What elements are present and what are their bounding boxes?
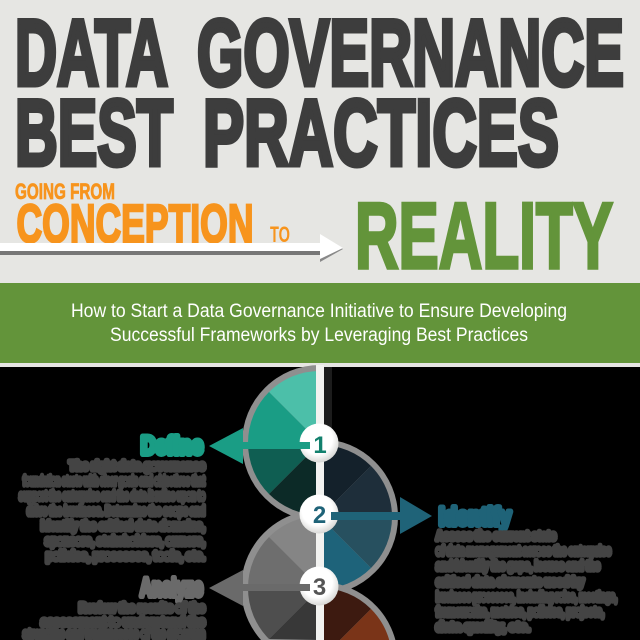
heading: identify: Identify xyxy=(439,503,511,531)
semicircle 4 xyxy=(320,582,395,640)
dark stripe beside spine xyxy=(324,367,332,432)
title: DATA xyxy=(15,0,168,105)
tagline: going from conception to reality xyxy=(15,179,613,288)
text block: analyze: Review the results of the xyxy=(79,601,205,615)
text block: identify: Assess the current state xyxy=(436,529,556,543)
semicircle 1: define xyxy=(242,365,320,521)
tagline: going from conception to reality: TO xyxy=(270,222,290,247)
header background xyxy=(0,0,640,284)
text block: analyze xyxy=(23,601,205,640)
text block: define: The right data governance xyxy=(69,459,205,473)
spine xyxy=(316,365,324,640)
process panel background xyxy=(0,367,640,640)
semicircle 3: analyze xyxy=(241,510,320,640)
text block: identify: data quality, etc. xyxy=(436,620,530,634)
text block: define: policies, processes, tools, etc. xyxy=(46,549,205,563)
text block: identify: critical data elements used by xyxy=(436,575,584,589)
band bottom strip xyxy=(0,363,640,367)
arrow 1 xyxy=(209,428,310,464)
text block: define: drive the business. Determine the scope and xyxy=(27,504,205,518)
badge 1 xyxy=(299,424,338,462)
arrow 2 xyxy=(330,497,432,534)
text block: define xyxy=(19,459,205,563)
arrow 3 xyxy=(209,570,310,606)
text block: define: identify the critical data domains, xyxy=(41,519,205,533)
text block: identify xyxy=(436,529,617,634)
tagline: going from conception to reality: CONCEPTION xyxy=(16,194,254,254)
heading: define: Define xyxy=(141,432,203,460)
process diagram xyxy=(209,365,432,640)
subtitle band xyxy=(0,283,640,363)
heading: analyze: Analyze xyxy=(140,574,203,602)
text block: define: support the enterprise and the data it relies upon to xyxy=(19,489,205,503)
badge 1: 1 xyxy=(313,432,327,459)
subtitle band: How to Start a Data Governance Initiative to Ensure Developing xyxy=(71,301,567,322)
semicircle 2: identify xyxy=(320,439,398,595)
badge 2: 2 xyxy=(313,502,326,529)
badge 3 xyxy=(299,566,338,606)
title xyxy=(15,0,624,185)
badge 3: 3 xyxy=(313,574,326,601)
tagline: going from conception to reality: GOING FROM xyxy=(15,179,115,204)
subtitle band: Successful Frameworks by Leveraging Best Practices xyxy=(110,325,528,346)
text block: analyze: assessment to understand the xyxy=(41,615,205,629)
text block: define: sponsors, stakeholders, owners, xyxy=(45,534,205,548)
title: BEST xyxy=(15,80,173,185)
arrow: conception to reality xyxy=(0,234,343,262)
badge 2 xyxy=(300,494,340,534)
text block: define: foundation starts with clear goals and objectives that xyxy=(23,474,205,488)
